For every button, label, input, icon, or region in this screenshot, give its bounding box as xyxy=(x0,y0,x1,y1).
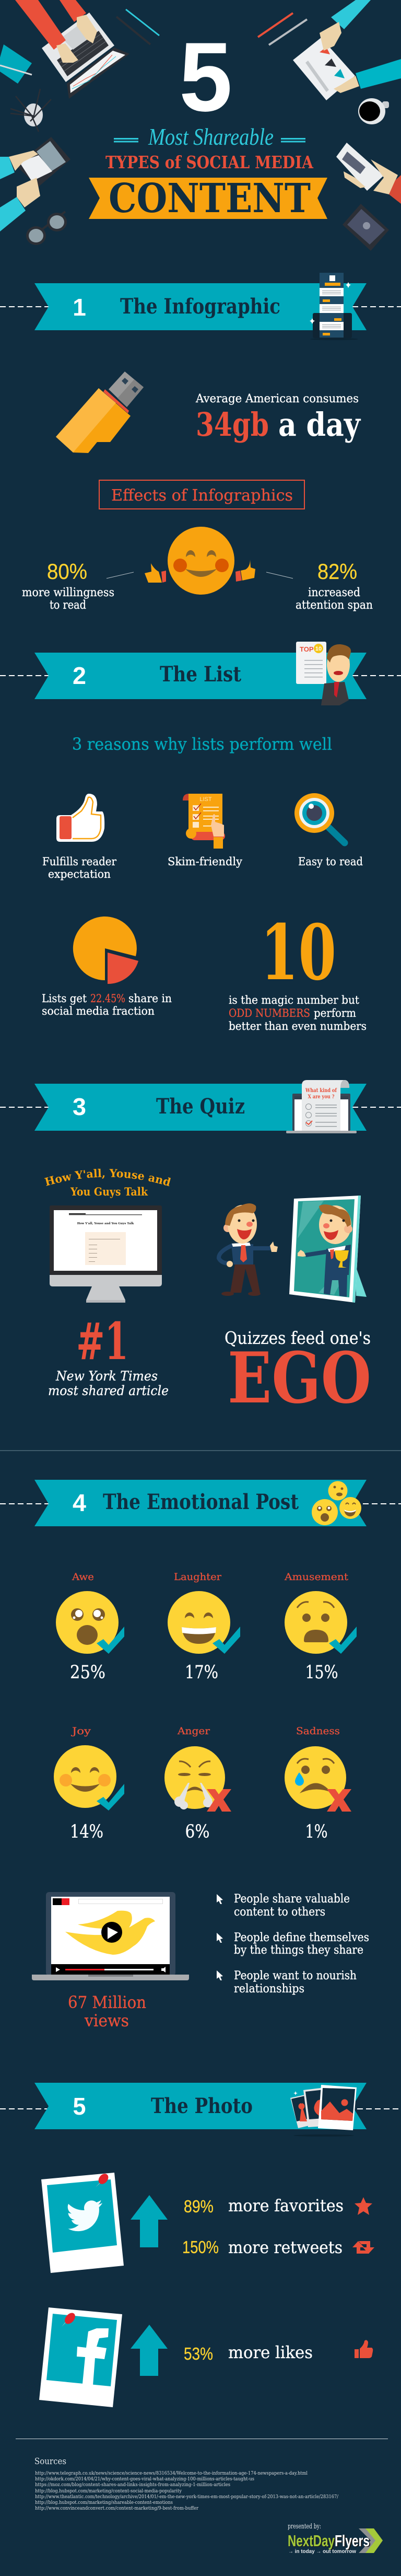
icon: monitor showing article: How Y'all, Youse and You Guys Talk xyxy=(77,1222,134,1225)
dashed connector xyxy=(0,2108,401,2109)
icon: list scroll: LIST xyxy=(199,796,212,803)
icon: businessman with thumb up xyxy=(219,1203,278,1296)
stat: 82 percent: attention span xyxy=(296,599,373,612)
banner ribbon xyxy=(34,653,367,699)
header illustrations xyxy=(0,0,401,251)
pie caption: Lists get xyxy=(42,992,87,1005)
logo: presented by next day flyers: NextDay xyxy=(288,2532,335,2550)
icon: laptop with typing hands xyxy=(15,0,129,99)
banner ribbon xyxy=(34,2083,367,2129)
effects box: Effects of Infographics xyxy=(111,486,293,505)
icon: notebook xyxy=(0,44,32,84)
logo: presented by next day flyers xyxy=(288,2523,383,2555)
rank caption: most shared article xyxy=(48,1383,169,1398)
icon: smiley with thumbs xyxy=(145,527,255,595)
stat: 80 percent: to read xyxy=(50,599,86,612)
source links: http://blog.hubspot.com/marketing/shareable-content-emotions xyxy=(35,2500,173,2505)
source links: http://www.theatlantic.com/technology/archive/2014/01/-em-the-new-york-times-em-most-popular-story-of-2013-was-not-an-article/283167/ xyxy=(35,2494,339,2500)
stat text: Average American consumes xyxy=(195,392,359,405)
icon: dark tablet xyxy=(343,204,389,251)
emotion: amusement: Amusement xyxy=(284,1571,348,1583)
stat: more favorites xyxy=(184,2196,372,2216)
twitter polaroid xyxy=(41,2172,124,2273)
sources xyxy=(34,2456,339,2511)
caption: Skim-friendly xyxy=(168,855,242,868)
stat: 82 percent xyxy=(296,559,373,612)
section number: 1 xyxy=(73,294,86,321)
section 3: the quiz xyxy=(0,1080,401,1419)
emotion: anger: Anger xyxy=(177,1725,210,1737)
source links: http://okdork.com/2014/04/21/why-content-goes-viral-what-analyzing-100-millions-articles-taught-us xyxy=(35,2477,254,2482)
stat: 80 percent: more willingness xyxy=(22,586,114,599)
views caption xyxy=(68,1992,146,2030)
section 2: the list xyxy=(0,642,401,1032)
bullet list: content to others xyxy=(234,1906,325,1919)
icon: man holding top 10 list: TOP xyxy=(300,645,314,653)
ego word: EGO xyxy=(228,1337,371,1419)
emotion: sadness xyxy=(285,1725,351,1842)
bullet list: by the things they share xyxy=(234,1944,363,1957)
growth arrow xyxy=(131,2195,168,2247)
icon: mirror with reflection and trophy xyxy=(289,1196,367,1303)
caption: expectation xyxy=(48,868,111,880)
stat: a day: a day xyxy=(278,405,361,444)
icon: glasses xyxy=(26,212,67,245)
banner ribbon xyxy=(34,1480,367,1526)
pie caption: 22.45% xyxy=(90,992,125,1005)
section heading: The Emotional Post xyxy=(103,1490,299,1514)
stat: 34gb: 34gb xyxy=(196,405,269,444)
icon: list scroll xyxy=(183,794,225,849)
emotion: sadness: Sadness xyxy=(296,1725,340,1737)
icon: pencil cup xyxy=(10,89,51,132)
magic number caption xyxy=(229,994,367,1032)
pie caption: share in xyxy=(128,992,172,1005)
icon: quiz paper on laptop: X are you ? xyxy=(308,1094,335,1100)
magic number caption: perform xyxy=(314,1007,356,1019)
magic number caption: is the magic number but xyxy=(229,994,360,1006)
icon: phone with hand xyxy=(336,143,401,204)
dashed connector xyxy=(0,1503,401,1504)
big number 5: 5 xyxy=(179,22,232,132)
panel: facebook stats xyxy=(39,2307,373,2407)
curved article title: You Guys Talk xyxy=(70,1185,148,1198)
section 4: the emotional post xyxy=(0,1480,401,2030)
emotion: anger xyxy=(164,1725,231,1842)
big number 10: 10 xyxy=(261,908,336,997)
icon: tablet with charts and hands right xyxy=(293,0,401,100)
pie caption xyxy=(42,992,172,1017)
stat: more favorites: more favorites xyxy=(228,2196,344,2215)
caption xyxy=(42,855,117,880)
icon: pens top left xyxy=(116,9,159,44)
logo: presented by next day flyers: NextDayFlyers xyxy=(288,2532,371,2550)
ego caption: Quizzes feed one's xyxy=(225,1328,371,1348)
stat: more likes: more likes xyxy=(228,2342,313,2362)
stat: more likes: 53% xyxy=(184,2344,213,2363)
section heading: The Infographic xyxy=(120,294,280,319)
logo: presented by next day flyers: Flyers xyxy=(335,2532,370,2550)
logo: presented by next day flyers: → in today → out tomorrow xyxy=(288,2549,356,2555)
icon: man holding top 10 list xyxy=(296,642,351,705)
icon: usb stick xyxy=(56,372,144,453)
stat: more favorites: 89% xyxy=(184,2197,214,2216)
section heading: The List xyxy=(160,662,241,687)
emotion: joy xyxy=(54,1725,124,1842)
bullet list xyxy=(217,1893,369,1995)
pie caption: social media fraction xyxy=(42,1005,155,1017)
icon: magnifier with eye xyxy=(294,793,345,843)
stat: more likes xyxy=(184,2340,373,2363)
pie chart xyxy=(73,916,138,984)
section number: 5 xyxy=(73,2093,86,2120)
icon: infographic on laptop xyxy=(310,273,358,340)
effects box xyxy=(99,480,304,509)
section number: 3 xyxy=(73,1093,86,1120)
curved article title: How Y'all, Youse and xyxy=(44,1168,171,1186)
banner ribbon xyxy=(34,283,367,330)
bullet list: People define themselves xyxy=(234,1931,369,1944)
icon: laptop video xyxy=(32,1892,189,1980)
panel: twitter stats xyxy=(41,2172,374,2273)
emotion: amusement xyxy=(284,1571,357,1683)
dashed connector xyxy=(0,1107,401,1108)
icon: pens top right xyxy=(258,13,307,45)
title xyxy=(89,22,327,222)
section 1: the infographic xyxy=(0,273,401,612)
emotion: sadness: 1% xyxy=(305,1821,328,1842)
stat: more retweets: more retweets xyxy=(228,2237,343,2257)
bullet list: relationships xyxy=(234,1982,304,1995)
section heading: The Photo xyxy=(151,2094,253,2118)
rank caption: New York Times xyxy=(55,1368,158,1384)
icon: tablet with hands left xyxy=(0,137,70,231)
emotion: laughter: Laughter xyxy=(174,1571,222,1583)
emotion: awe: Awe xyxy=(72,1571,94,1583)
icon: quiz paper on laptop: What kind of xyxy=(305,1088,337,1094)
icon: three emoji xyxy=(312,1481,361,1525)
bullet list: People share valuable xyxy=(234,1893,350,1906)
double lines left xyxy=(114,138,138,142)
content ribbon xyxy=(89,178,327,219)
magic number caption: better than even numbers xyxy=(229,1020,367,1032)
section number: 2 xyxy=(73,662,86,689)
icon: thumbs up xyxy=(56,794,104,842)
views caption: views xyxy=(84,2011,129,2030)
number one rank: #1 xyxy=(76,1312,128,1371)
emotion: laughter xyxy=(168,1571,240,1683)
magic number caption: ODD NUMBERS xyxy=(229,1007,310,1019)
bullet list: People want to nourish xyxy=(234,1969,357,1982)
sources heading: Sources xyxy=(34,2456,66,2467)
caption: Fulfills reader xyxy=(42,855,117,868)
stat: 80 percent xyxy=(22,559,114,612)
icon: man holding top 10 list: 10 xyxy=(315,646,322,652)
emotion: joy: Joy xyxy=(71,1725,91,1737)
icon: polaroid photos xyxy=(290,2085,357,2137)
facebook polaroid xyxy=(39,2307,122,2407)
stat: more retweets xyxy=(182,2237,374,2257)
curved article title xyxy=(44,1168,171,1198)
stat: 82 percent: 82% xyxy=(317,559,357,584)
growth arrow xyxy=(131,2325,168,2376)
stat: 80 percent: 80% xyxy=(47,559,87,584)
stat: 82 percent: increased xyxy=(308,586,360,599)
source links: http://www.convinceandconvert.com/content-marketing/9-best-from-buffer xyxy=(35,2506,199,2511)
icon: monitor showing article xyxy=(50,1205,162,1303)
emotion: amusement: 15% xyxy=(305,1662,338,1683)
source links: http://blog.hubspot.com/marketing/content-social-media-popularity xyxy=(35,2489,182,2494)
rank caption xyxy=(48,1368,169,1398)
logo: presented by next day flyers: presented by: xyxy=(288,2523,321,2531)
double lines right xyxy=(281,138,305,142)
subheading: 3 reasons why lists perform well xyxy=(72,734,332,754)
dashed connector xyxy=(0,306,401,307)
section 5: the photo xyxy=(0,2083,401,2407)
emotion: awe: 25% xyxy=(70,1662,105,1683)
emotion: laughter: 17% xyxy=(185,1662,218,1683)
emotion: anger: 6% xyxy=(185,1821,210,1842)
dashed connector xyxy=(0,675,401,676)
views caption: 67 Million xyxy=(68,1992,146,2012)
script subtitle: Most Shareable xyxy=(148,123,274,150)
banner ribbon xyxy=(34,1084,367,1131)
source links: https://moz.com/blog/content-shares-and-links-insights-from-analyzing-1-million-articles xyxy=(35,2482,230,2488)
caption: Easy to read xyxy=(298,855,363,868)
section heading: The Quiz xyxy=(156,1094,245,1119)
source links xyxy=(35,2471,339,2511)
icon: coffee cup xyxy=(358,98,389,124)
title line: TYPES of SOCIAL MEDIA xyxy=(105,152,313,172)
stat: more retweets: 150% xyxy=(182,2237,219,2257)
icon: quiz paper on laptop xyxy=(286,1080,357,1133)
content word: CONTENT xyxy=(109,175,311,222)
emotion: awe xyxy=(56,1571,124,1683)
section number: 4 xyxy=(73,1489,86,1516)
source links: http://www.telegraph.co.uk/news/science/science-news/8316534/Welcome-to-the-information-age-174-newspapers-a-day.html xyxy=(35,2471,308,2476)
emotion: joy: 14% xyxy=(70,1821,103,1842)
